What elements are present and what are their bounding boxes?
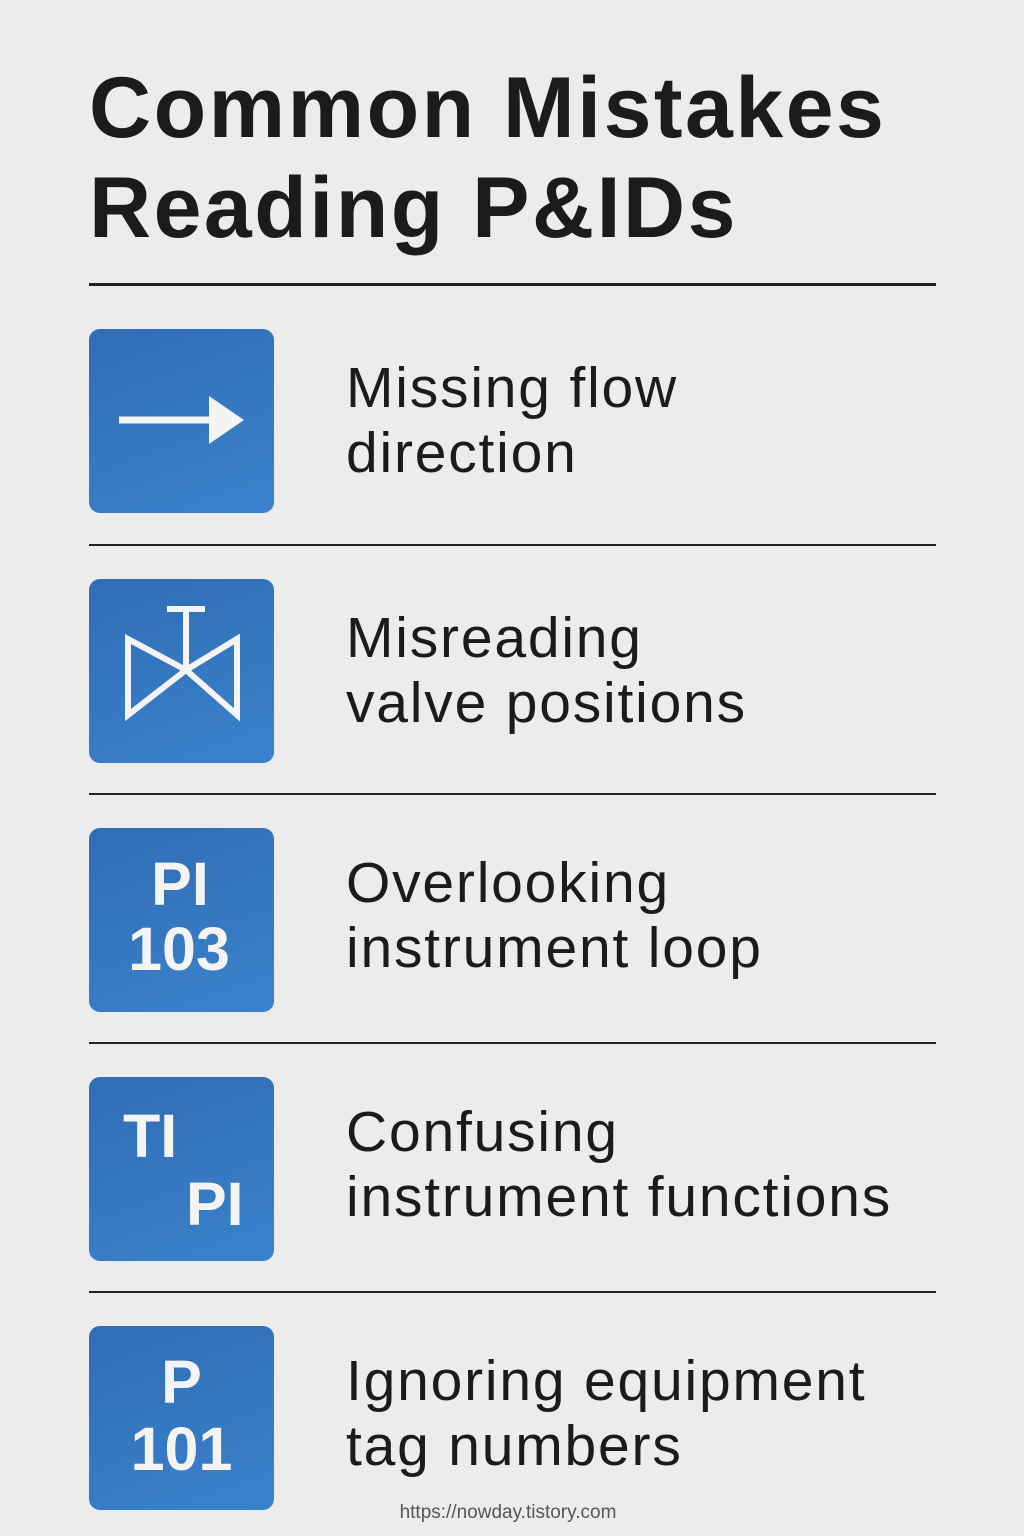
text: Overlooking	[346, 851, 670, 915]
icon: P 101: P	[161, 1348, 202, 1416]
text: Ignoring equipment	[346, 1349, 866, 1413]
icon: PI 103: PI	[151, 850, 209, 918]
text	[346, 1349, 866, 1478]
text: Confusing	[346, 1100, 619, 1164]
icon: P 101: 101	[131, 1415, 232, 1483]
text: direction	[346, 421, 578, 485]
icon: TI PI: PI	[186, 1170, 244, 1238]
title: Common Mistakes	[89, 60, 886, 156]
title: Reading P&IDs	[89, 160, 738, 256]
icon: arrow	[89, 329, 274, 513]
text: valve positions	[346, 671, 747, 735]
text: instrument loop	[346, 916, 763, 980]
icon: valve	[89, 579, 274, 763]
title	[89, 60, 886, 256]
item 3: instrument loop	[89, 828, 763, 1012]
text	[346, 606, 747, 735]
icon: TI PI: TI	[123, 1102, 177, 1170]
text	[346, 356, 678, 485]
text: tag numbers	[346, 1414, 683, 1478]
item 4: instrument functions	[89, 1077, 892, 1261]
text: Misreading	[346, 606, 643, 670]
item 5: equipment tags	[89, 1326, 866, 1510]
item 2: valve	[89, 579, 747, 763]
text: Missing flow	[346, 356, 678, 420]
text: instrument functions	[346, 1165, 892, 1229]
icon: PI 103: 103	[128, 915, 230, 983]
text	[346, 1100, 892, 1229]
icon: TI PI	[89, 1077, 274, 1261]
icon: P 101	[89, 1326, 274, 1510]
icon: PI 103	[89, 828, 274, 1012]
text	[346, 851, 763, 980]
item 1: flow direction	[89, 329, 678, 513]
footer url: https://nowday.tistory.com	[400, 1502, 616, 1523]
